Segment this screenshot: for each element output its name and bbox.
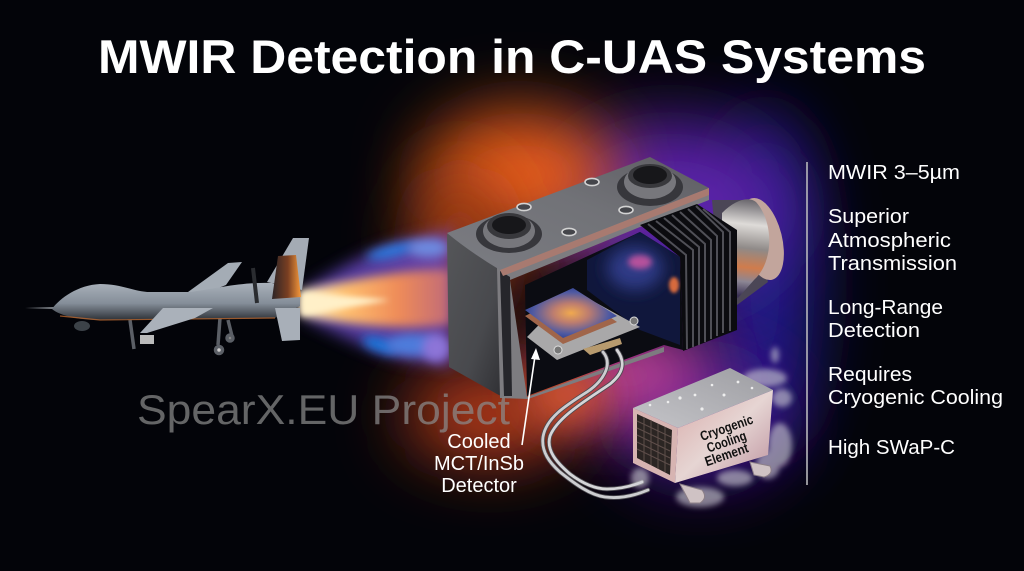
interior thermal reflection bbox=[587, 232, 680, 345]
feature: long range: Detection bbox=[828, 320, 920, 342]
MWIR camera bbox=[447, 157, 792, 399]
drone lower tail bbox=[275, 308, 300, 341]
detector label: Detector bbox=[441, 475, 517, 497]
feature: cooling: Requires bbox=[828, 364, 912, 386]
orange belly glow bbox=[60, 316, 275, 320]
detector connectors bbox=[583, 338, 622, 355]
detector callout arrow bbox=[522, 348, 540, 445]
camera interior bbox=[525, 232, 683, 396]
feature: long range: Long-Range bbox=[828, 297, 943, 319]
detector sensor bbox=[525, 288, 617, 338]
feature: SWaP-C: High SWaP-C bbox=[828, 437, 955, 459]
feature: wavelength: MWIR 3–5µm bbox=[828, 162, 960, 184]
drone fuselage bbox=[52, 283, 300, 320]
camera left face bbox=[447, 234, 505, 398]
coolant tubes bbox=[543, 350, 648, 498]
lens barrel bbox=[712, 193, 792, 305]
cooler label face bbox=[675, 390, 773, 483]
frame dark groove bbox=[500, 271, 512, 396]
drone tail fin upper bbox=[267, 238, 309, 290]
watermark: SpearX.EU Project bbox=[137, 386, 510, 433]
top ports and screws bbox=[476, 164, 683, 253]
detector plate bbox=[525, 288, 640, 360]
camera top face bbox=[447, 157, 709, 270]
title: MWIR Detection in C-UAS Systems bbox=[98, 30, 926, 83]
cooler feet bbox=[680, 462, 771, 503]
exhaust plume bbox=[300, 230, 452, 368]
drone lower wing bbox=[140, 308, 213, 333]
drone propeller bbox=[253, 268, 257, 303]
cryogenic cooling element bbox=[631, 347, 792, 507]
detector label: MCT/InSb bbox=[434, 453, 524, 475]
cooler top bbox=[633, 368, 773, 428]
feature list bbox=[828, 162, 1003, 459]
detector label bbox=[434, 431, 524, 497]
camera front frame bbox=[497, 188, 709, 399]
vapor clouds bbox=[631, 347, 792, 507]
drone rudder heated bbox=[272, 255, 301, 299]
drone bbox=[25, 238, 309, 354]
cooler label: Cryogenic bbox=[698, 412, 755, 444]
feature: long range bbox=[828, 297, 943, 342]
cooler droplets bbox=[649, 381, 753, 411]
feature: atmospheric transmission: Transmission bbox=[828, 253, 957, 275]
cooler label: Element bbox=[703, 440, 751, 469]
feature: cooling: Cryogenic Cooling bbox=[828, 387, 1003, 409]
drone landing gear bbox=[74, 318, 233, 354]
drone nose probe bbox=[25, 307, 54, 309]
feature: atmospheric transmission: Superior bbox=[828, 206, 909, 228]
cooler vent face bbox=[633, 408, 678, 483]
right list divider bbox=[806, 162, 808, 485]
feature: atmospheric transmission: Atmospheric bbox=[828, 230, 951, 252]
drone upper wing bbox=[188, 262, 242, 293]
feature: atmospheric transmission bbox=[828, 206, 957, 275]
heat sink fins bbox=[640, 204, 737, 351]
detector label: Cooled bbox=[447, 431, 511, 453]
cooler label bbox=[698, 412, 755, 469]
feature: cooling bbox=[828, 364, 1003, 409]
cooler label: Cooling bbox=[705, 428, 748, 456]
